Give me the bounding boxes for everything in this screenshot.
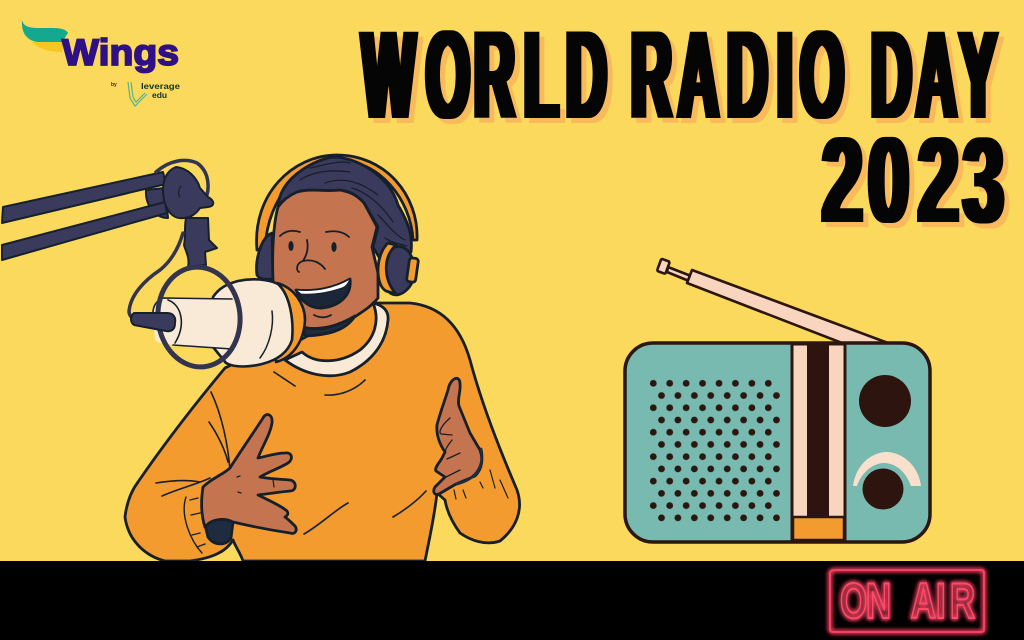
sweater [125, 303, 520, 561]
teeth [296, 279, 350, 294]
left ear cup [257, 233, 273, 279]
mic orange cap [276, 283, 305, 362]
dial arc [853, 452, 921, 486]
leverage edu text: leverage [141, 81, 180, 91]
mic capsule [131, 313, 175, 331]
leverage edu mark [128, 82, 147, 106]
cable [129, 233, 183, 318]
presenter illustration [125, 155, 520, 561]
title text: 2023 [822, 113, 1004, 249]
lower dial [862, 468, 904, 510]
finger creases [440, 418, 460, 477]
hand shape [202, 415, 296, 533]
ear pad [378, 243, 396, 294]
neon on air sign [830, 570, 984, 632]
neon frame [830, 570, 984, 632]
tuning strip [792, 344, 845, 541]
ear cup shell [383, 246, 414, 295]
antenna thick section [687, 270, 888, 343]
mic body lines [153, 298, 232, 349]
strip orange base [793, 517, 844, 540]
mouth [296, 279, 350, 308]
radio illustration [625, 259, 930, 542]
palm creases [237, 476, 274, 493]
band clip [406, 258, 419, 283]
hair [278, 157, 411, 262]
title [362, 5, 1009, 254]
hand shape [434, 378, 482, 494]
mic body [153, 298, 232, 349]
boom rear joint [146, 188, 168, 218]
edu text: edu [152, 90, 167, 100]
logo: Wings by Leverage Edu [22, 20, 180, 106]
mic head [213, 279, 292, 366]
neon text: ON AIR [840, 574, 975, 630]
logo wordmark: Wings [62, 32, 179, 73]
boom spring loop [156, 160, 208, 200]
title text: WORLD RADIO DAY [362, 5, 997, 145]
right hand [434, 378, 508, 499]
antenna tip [657, 259, 670, 274]
black footer bar [0, 561, 1024, 640]
antenna thin section [667, 267, 691, 281]
headphone band [257, 155, 417, 250]
cuff edge [457, 449, 482, 484]
mic head crease [260, 311, 272, 358]
cuff folds [454, 470, 508, 499]
logo swoosh [22, 20, 68, 52]
title shadow [367, 10, 1009, 254]
radio body [625, 343, 930, 542]
upper boom arm [2, 172, 166, 223]
mount neck [184, 218, 217, 267]
facial features [280, 231, 349, 317]
upper dial [859, 375, 911, 427]
hair strands [300, 162, 407, 246]
neck shadow [303, 316, 355, 336]
title shadow: 2023 [827, 118, 1009, 254]
hub details [179, 186, 181, 197]
microphone on boom arm [2, 160, 305, 371]
right ear cup [378, 243, 419, 295]
boom hub [163, 167, 213, 218]
title text [362, 5, 1004, 249]
logo byline: by [111, 82, 117, 88]
strip background [792, 344, 845, 541]
strip dark centre [807, 344, 829, 516]
sleeve lining [205, 519, 233, 544]
title shadow: WORLD RADIO DAY [367, 10, 1002, 150]
speaker grille [649, 379, 781, 525]
collar [285, 303, 388, 376]
sweater folds [156, 372, 426, 534]
lower boom arm [2, 202, 167, 260]
face [273, 190, 378, 329]
sleeve cuff [184, 497, 205, 553]
shock mount ring [153, 263, 245, 371]
antenna [657, 259, 888, 343]
left hand [202, 415, 296, 544]
